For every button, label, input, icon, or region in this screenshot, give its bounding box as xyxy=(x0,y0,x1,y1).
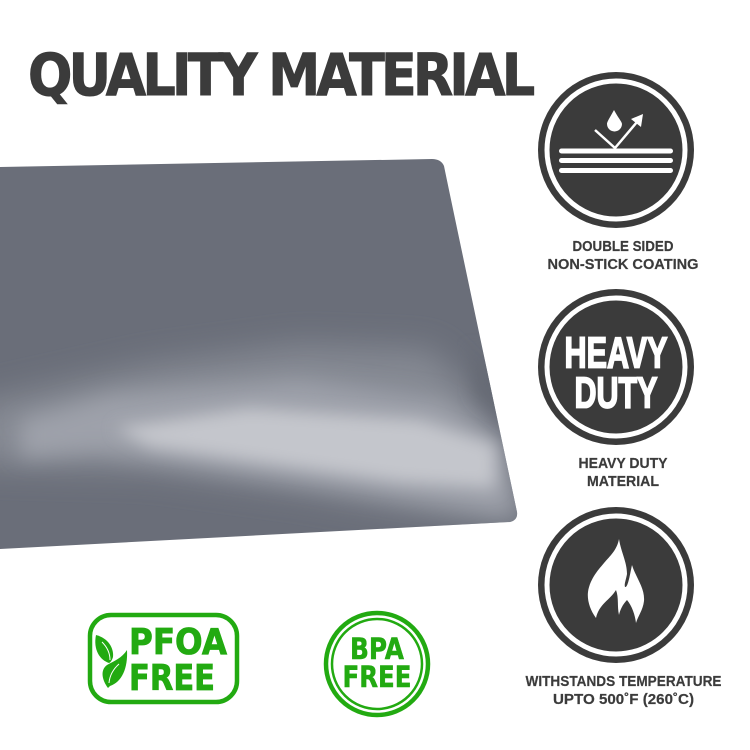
badge: PFOA free xyxy=(90,615,237,702)
icon: bounce arrow xyxy=(595,122,637,148)
label: double sided non-stick coating xyxy=(548,239,698,273)
label: double sided non-stick coating: DOUBLE SIDED xyxy=(572,239,674,255)
icon: water drop xyxy=(607,110,622,132)
product: grey non-stick mat xyxy=(0,150,530,560)
icon: non-stick coating xyxy=(538,72,694,228)
icon: heavy duty: HEAVY xyxy=(564,328,668,378)
badge: PFOA free: FREE xyxy=(129,658,215,699)
icon: coating layers xyxy=(559,148,673,173)
icon: flame xyxy=(538,507,694,663)
badge: BPA free: FREE xyxy=(342,660,412,694)
badge: BPA free: BPA xyxy=(350,632,404,666)
icon: heavy duty: DUTY xyxy=(574,368,658,418)
label: heavy duty material xyxy=(578,456,668,490)
badge: PFOA free: PFOA xyxy=(129,622,227,663)
title: QUALITY MATERIAL xyxy=(28,42,534,110)
label: withstands temperature: UPTO 500˚F (260˚C) xyxy=(553,692,694,708)
icon: heavy duty xyxy=(538,289,694,445)
icon: leaves xyxy=(95,635,127,688)
label: heavy duty material: MATERIAL xyxy=(587,474,659,490)
label: heavy duty material: HEAVY DUTY xyxy=(578,456,668,472)
badge: BPA free xyxy=(326,613,428,715)
label: double sided non-stick coating: NON-STICK COATING xyxy=(548,257,698,273)
label: withstands temperature: WITHSTANDS TEMPERATURE xyxy=(526,674,722,690)
label: withstands temperature xyxy=(526,674,722,708)
